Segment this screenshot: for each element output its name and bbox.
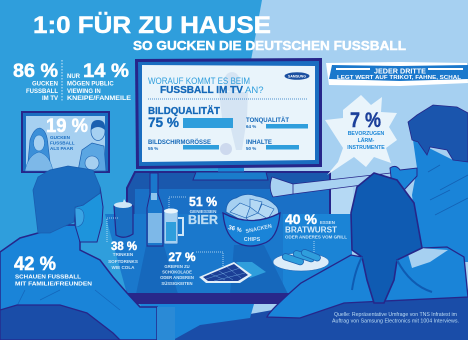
stat: 40 percent bratwurst: BRATWURST — [285, 226, 337, 234]
stat: 86 percent: IM TV — [42, 96, 58, 102]
ear — [75, 208, 84, 227]
screen heading — [148, 76, 263, 96]
bar: Bildschirmgröße 55 percent — [148, 139, 219, 151]
banner: every third: JEDER DRITTE — [374, 66, 426, 76]
source note — [332, 312, 459, 324]
stat: 40 percent bratwurst — [285, 211, 347, 240]
chocolate bar — [199, 262, 266, 283]
stat: 14 percent — [67, 61, 131, 102]
panel: television screen with survey — [135, 58, 322, 180]
stat: 38 percent soft drinks: WIE COLA — [112, 265, 135, 270]
sofa left back — [0, 305, 120, 340]
soda can — [114, 199, 133, 237]
panel: picture frame with couple, 19 percent: GUCKEN — [50, 135, 71, 140]
panel: picture frame with couple, 19 percent — [21, 111, 110, 173]
vuvuzela — [270, 172, 400, 197]
screen heading: AN? — [245, 85, 263, 96]
ghost player on screen — [219, 72, 248, 155]
Samsung logo: SAMSUNG — [288, 74, 306, 78]
starburst callout: 7 percent — [325, 95, 397, 175]
table surface — [105, 214, 352, 304]
chips bowl: SNACKEN — [245, 224, 273, 235]
sofa — [120, 297, 468, 340]
bar: Tonqualität 64 percent — [246, 117, 308, 129]
man's arm in front of table — [140, 304, 254, 340]
bar: Inhalte 50 percent: INHALTE — [246, 140, 272, 146]
stat: 51 percent beer: GENIESSEN — [190, 209, 217, 214]
bar: Bildschirmgröße 55 percent: BILDSCHIRMGRÖSSE — [148, 139, 211, 146]
woman in picture — [25, 128, 53, 171]
stat: 42 percent family and friends: 42 % — [14, 254, 56, 275]
chips bowl: CHIPS — [244, 237, 261, 243]
bar: Tonqualität 64 percent: TONQUALITÄT — [246, 117, 289, 124]
bar: Inhalte 50 percent — [246, 140, 299, 151]
bar: Bildschirmgröße 55 percent: 55 % — [148, 146, 158, 151]
bar: Bildqualität 75 percent — [148, 104, 233, 130]
stat: 42 percent family and friends: SCHAUEN FUSSBALL — [15, 274, 82, 280]
Samsung logo — [284, 72, 310, 80]
source note: Auftrag von Samsung Electronics mit 1004 Interviews. — [332, 318, 459, 324]
right man: fist — [390, 166, 417, 190]
subtitle: SO GUCKEN DIE DEUTSCHEN FUSSBALL — [133, 38, 406, 53]
stat: 38 percent soft drinks: TRINKEN — [113, 252, 134, 257]
stat: 40 percent bratwurst: ESSEN — [320, 220, 335, 225]
stat: 38 percent soft drinks: SOFTDRINKS — [108, 259, 138, 264]
panel: picture frame with couple, 19 percent: FUSSBALL — [50, 140, 75, 146]
stat: 27 percent sweets: ODER ANDEREN — [160, 275, 194, 280]
woman: body, arm, hair — [267, 173, 468, 318]
stat: 40 percent bratwurst: ODER ANDERES VOM GRILL — [285, 234, 347, 240]
hair — [33, 166, 100, 233]
chips bowl — [223, 194, 280, 246]
bar: Tonqualität 64 percent: 64 % — [246, 124, 256, 129]
starburst callout: 7 percent: BEVORZUGEN — [348, 131, 385, 137]
stat: 51 percent beer — [188, 194, 218, 227]
starburst callout: 7 percent: LÄRM- — [358, 137, 375, 144]
banner: every third — [326, 62, 468, 86]
screen heading: FUSSBALL IM TV — [160, 84, 243, 96]
left man: body, head and hair — [0, 166, 175, 340]
stat: 14 percent: KNEIPE/FANMEILE — [67, 96, 131, 102]
beer mug — [164, 208, 183, 244]
stat: 27 percent sweets: GREIFEN ZU — [164, 264, 190, 269]
stat: 14 percent: VIEWING IN — [67, 89, 101, 95]
right man: body, head and hair — [408, 105, 468, 262]
plate of sausages — [273, 248, 329, 271]
stat: 51 percent beer: 51 % — [189, 194, 217, 209]
face — [75, 187, 103, 242]
stat: 27 percent sweets: SCHOKOLADE — [162, 270, 192, 274]
stat: 27 percent sweets — [160, 250, 196, 286]
stat: 42 percent family and friends — [14, 254, 92, 288]
room wall behind the table — [127, 172, 353, 300]
stat: 86 percent: FUSSBALL — [26, 89, 58, 95]
man in picture — [78, 120, 106, 171]
banner: every third: LEGT WERT AUF TRIKOT, FAHNE, SCHAL — [337, 75, 462, 81]
TV stand — [193, 165, 268, 180]
chips bowl: 36 % — [228, 225, 243, 234]
stat: 86 percent: 86 % — [13, 61, 58, 82]
source note: Quelle: Repräsentative Umfrage von TNS Infratest im — [334, 312, 457, 318]
title: 1:0 FÜR ZU HAUSE — [33, 12, 271, 39]
stat: 14 percent: NUR — [67, 74, 81, 80]
stat: 14 percent: 14 % — [83, 61, 129, 82]
stat: 38 percent soft drinks: 38 % — [111, 239, 137, 253]
beer bottle — [147, 173, 163, 246]
stat: 27 percent sweets: 27 % — [168, 250, 196, 264]
stat: 42 percent family and friends: MIT FAMILIE/FREUNDEN — [15, 282, 92, 288]
bar: Bildqualität 75 percent: 75 % — [148, 114, 180, 130]
stat: 14 percent: MÖGEN PUBLIC — [67, 80, 114, 88]
striped sleeve — [157, 307, 175, 340]
screen heading: WORAUF KOMMT ES BEIM — [148, 76, 250, 87]
bar: Inhalte 50 percent: 50 % — [246, 146, 256, 151]
stat: 86 percent: GUCKEN — [32, 82, 58, 88]
stat: 38 percent soft drinks — [108, 239, 138, 270]
starburst callout: 7 percent: 7 % — [350, 109, 381, 132]
stat: 40 percent bratwurst: 40 % — [285, 211, 318, 227]
stat: 51 percent beer: BIER — [188, 213, 218, 227]
stat: 27 percent sweets: SÜSSIGKEITEN — [161, 281, 193, 286]
stat: 86 percent — [13, 61, 58, 102]
panel: picture frame with couple, 19 percent: 19 % — [46, 116, 88, 137]
bar: Bildqualität 75 percent: BILDQUALITÄT — [148, 104, 220, 117]
panel: picture frame with couple, 19 percent: ALS PAAR — [50, 146, 74, 151]
starburst callout: 7 percent: INSTRUMENTE — [347, 145, 385, 151]
